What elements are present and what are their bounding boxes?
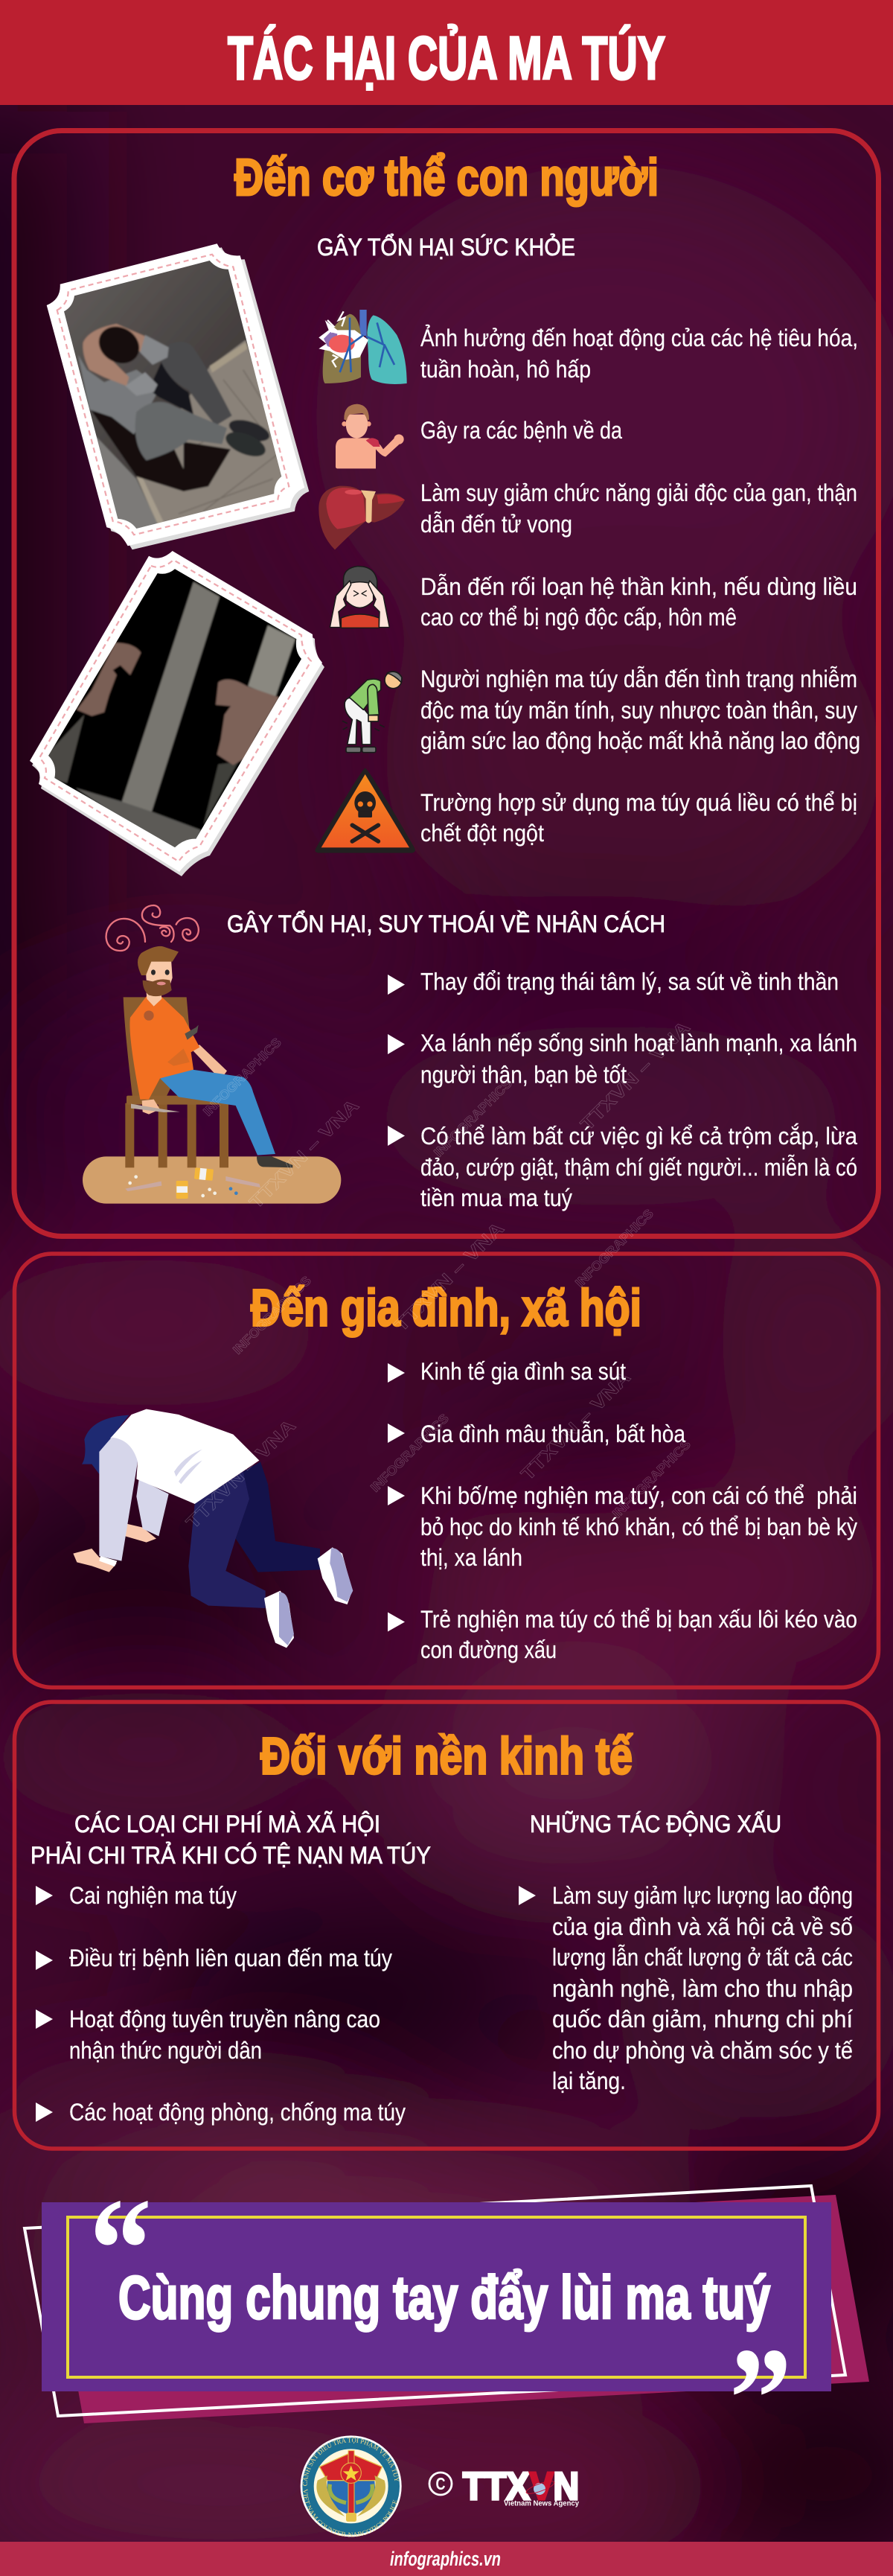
bullet: labour force: cho dự phòng và chăm sóc y tế: [552, 2037, 853, 2064]
watermarks: TTXVN – VNA: [391, 1219, 508, 1336]
heading: economy: Đối với nền kinh tế: [260, 1727, 633, 1785]
logo: counter-narcotics police emblem: [301, 2435, 402, 2537]
bullet: children: Khi bố/mẹ nghiện ma tuý, con cái có thể phải: [420, 1482, 857, 1509]
logo: TTXVN: TTXVN: [463, 2465, 579, 2508]
text: chronic poisoning: [420, 666, 860, 754]
subheading: personality decline: GÂY TỔN HẠI, SUY THOÁI VỀ NHÂN CÁCH: [227, 911, 665, 937]
text: skin disease: Gây ra các bệnh về da: [420, 417, 622, 444]
icon: damaged lungs: [319, 310, 407, 384]
icon: person with skin disease: [336, 404, 404, 468]
logo: counter-narcotics police emblem: VIET NAM COUNTER-NARCOTICS POLICE: [303, 2489, 397, 2537]
bullet: awareness: Hoạt động tuyên truyền nâng cao: [69, 2006, 380, 2033]
photo: hands on prison bars: [30, 551, 324, 876]
subheading: health damage: GÂY TỔN HẠI SỨC KHỎE: [317, 234, 575, 261]
watermarks: INFOGRAPHICS: [572, 1206, 656, 1290]
illustration: man on chair with syringes: [83, 905, 341, 1204]
bullet: isolation: người thân, bạn bè tốt: [420, 1062, 627, 1088]
icon: headache person: [330, 567, 389, 628]
watermarks: [182, 1018, 694, 1533]
panel: effects on the economy: [15, 1702, 878, 2149]
text: digestive and circulatory: tuần hoàn, hô hấp: [420, 356, 591, 383]
text: nervous system: cao cơ thể bị ngộ độc cấp, hôn mê: [420, 604, 737, 631]
quote mark open: “: [89, 2167, 152, 2330]
quote mark close: ”: [729, 2317, 792, 2480]
watermarks: INFOGRAPHICS: [368, 1411, 452, 1495]
bullet: crime: [388, 1123, 857, 1211]
bullet: prevention: Các hoạt động phòng, chống ma túy: [69, 2099, 406, 2126]
photo: man with head in hands: [47, 243, 309, 549]
text: nervous system: Dẫn đến rối loạn hệ thần kinh, nếu dùng liều: [420, 573, 857, 600]
icon: weak bent-over person: [342, 672, 402, 753]
text: overdose: chết đột ngột: [420, 820, 544, 847]
subheading: bad impacts: NHỮNG TÁC ĐỘNG XẤU: [530, 1811, 781, 1837]
watermarks: INFOGRAPHICS: [431, 1076, 515, 1160]
watermarks: INFOGRAPHICS: [200, 1035, 284, 1119]
heading: family: Đến gia đình, xã hội: [251, 1279, 641, 1337]
logo: TTXVN: Vietnam News Agency: [504, 2500, 579, 2508]
bullet: labour force: quốc dân giảm, nhưng chi phí: [552, 2006, 853, 2033]
panel: effects on family and society: [15, 1254, 878, 1687]
icon: liver: [319, 486, 405, 549]
bullet: mental state: Thay đổi trạng thái tâm lý, sa sút về tinh thần: [420, 968, 839, 995]
footer url: infographics.vn: [390, 2548, 501, 2570]
subheading: costs: [31, 1811, 431, 1869]
callout: call to action banner: [25, 2167, 869, 2480]
icon: copyright: C: [436, 2474, 445, 2493]
bullet: crime: Có thể làm bất cứ việc gì kể cả trộm cắp, lừa: [420, 1123, 857, 1150]
watermarks: INFOGRAPHICS: [230, 1273, 314, 1357]
bullet: bad friends: [388, 1606, 857, 1663]
bullet: family economy: Kinh tế gia đình sa sút: [420, 1358, 626, 1385]
icon: skull warning triangle: [315, 768, 415, 853]
text: nervous system: [420, 573, 857, 631]
watermarks: INFOGRAPHICS: [609, 1437, 694, 1521]
icon: copyright: [429, 2473, 452, 2495]
bullet: treatment: Điều trị bệnh liên quan đến ma túy: [69, 1945, 392, 1971]
bullet: isolation: [388, 1030, 857, 1088]
panel: effects on the human body: [14, 131, 878, 1236]
bullet: crime: tiền mua ma tuý: [420, 1185, 572, 1211]
bullet: family conflict: Gia đình mâu thuẫn, bất hòa: [420, 1421, 685, 1447]
bullet: awareness: nhận thức người dân: [69, 2037, 262, 2064]
watermarks: TTXVN – VNA: [517, 1368, 635, 1485]
watermarks: TTXVN – VNA: [246, 1096, 363, 1213]
footer band: [0, 2542, 893, 2576]
subheading: costs: CÁC LOẠI CHI PHÍ MÀ XÃ HỘI: [74, 1811, 380, 1837]
watermarks: TTXVN – VNA: [577, 1018, 694, 1135]
bullet: children: [388, 1482, 857, 1571]
text: liver function: [420, 479, 857, 538]
subheading: costs: PHẢI CHI TRẢ KHI CÓ TỆ NẠN MA TÚY: [31, 1842, 431, 1869]
text: digestive and circulatory: [420, 325, 858, 383]
bullet: rehab: Cai nghiện ma túy: [69, 1882, 237, 1909]
bullet: labour force: [519, 1882, 853, 2094]
illustration: man crawling: [73, 1409, 353, 1648]
bullet: labour force: của gia đình và xã hội cả về số: [552, 1913, 853, 1940]
bullet: labour force: lại tăng.: [552, 2068, 626, 2094]
text: overdose: [420, 789, 857, 847]
heading: body: Đến cơ thể con người: [234, 148, 659, 206]
logo: counter-narcotics police emblem: CẢNH SÁT ĐIỀU TRA TỘI PHẠM VỀ MA TÚY: [302, 2436, 399, 2486]
bullet: children: thị, xa lánh: [420, 1544, 522, 1571]
watermarks: TTXVN – VNA: [182, 1416, 300, 1533]
bullet: awareness: [36, 2006, 380, 2064]
header band: [0, 0, 893, 105]
bullet: labour force: ngành nghề, làm cho thu nhập: [552, 1975, 853, 2002]
title: TÁC HẠI CỦA MA TÚY: [228, 25, 665, 92]
text: liver function: dẫn đến tử vong: [420, 511, 572, 538]
bullet: bad friends: con đường xấu: [420, 1636, 557, 1663]
